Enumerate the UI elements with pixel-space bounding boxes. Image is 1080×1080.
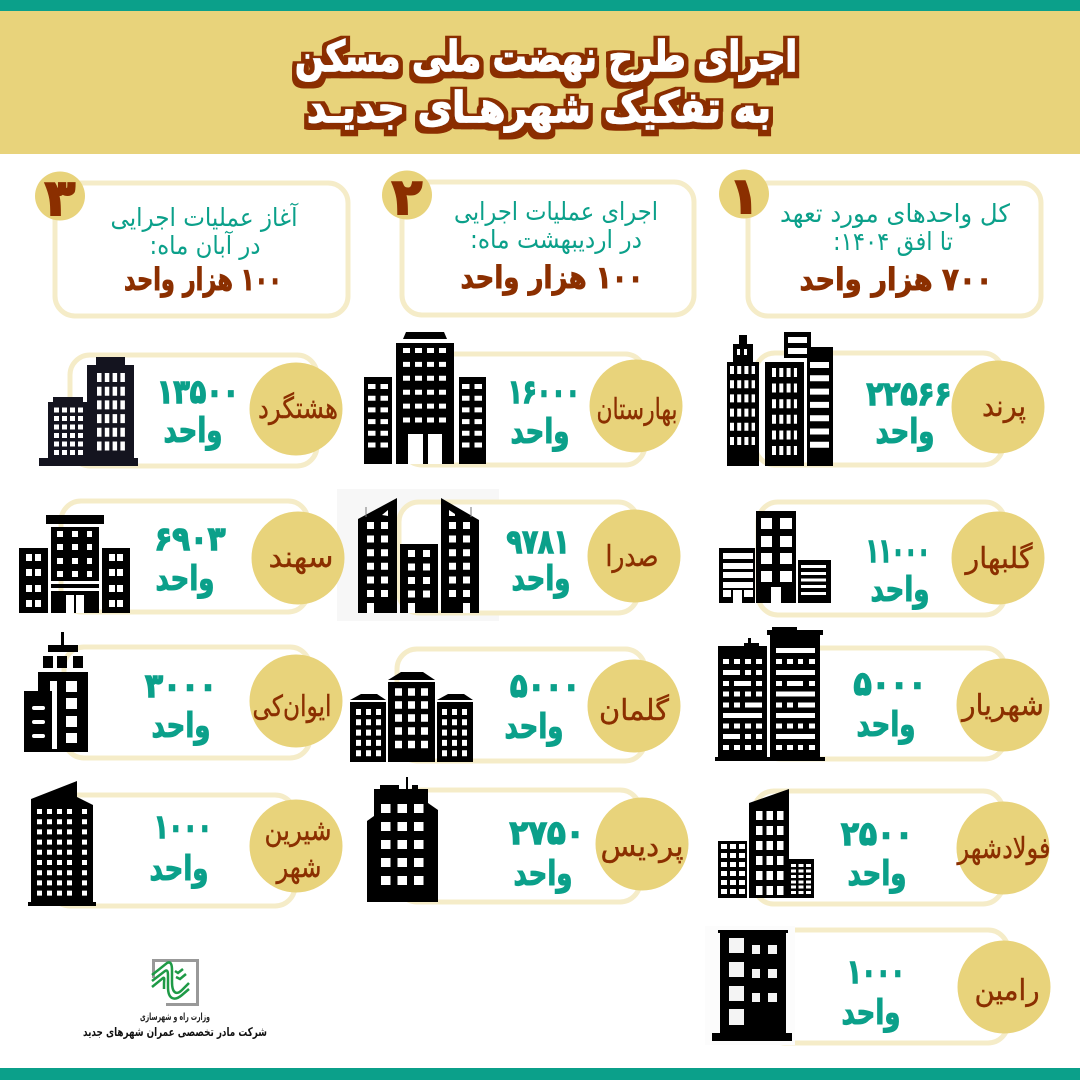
name circle Fooladshahr: فولادشهر: [956, 831, 1050, 865]
city row: Eyvanki: [24, 632, 342, 758]
city row: Shahriar: [715, 627, 1050, 761]
name circle Fooladshahr: [956, 802, 1050, 894]
icon: Hashtgerd buildings: [39, 357, 138, 466]
badge 1: ۱: [729, 167, 759, 225]
name circle Golbahar: [952, 512, 1044, 604]
panel: step 2 summary: [382, 168, 694, 315]
value Hashtgerd: ۱۳۵۰۰: [157, 372, 239, 411]
value Shahriar: ۵۰۰۰: [854, 664, 926, 703]
unit Fooladshahr: واحد: [848, 854, 906, 894]
name circle Baharestan: [590, 360, 682, 452]
unit Baharestan: واحد: [510, 412, 570, 452]
value Golbahar: ۱۱۰۰۰: [866, 531, 930, 570]
badge 1: [719, 167, 769, 225]
city row: Pardis: [367, 777, 688, 902]
name circle Shahriar: [956, 658, 1050, 752]
name circle Sadra: [588, 510, 680, 602]
panel: step 3 summary: [35, 169, 348, 316]
icon: Sahand buildings: [19, 515, 130, 613]
city row: Sadra: [358, 498, 680, 613]
badge 2: [382, 168, 432, 226]
step 3 total: ۱۰۰ هزار واحد: [124, 262, 282, 298]
city row: Shirin Shahr: [28, 781, 342, 906]
name circle Parand: [952, 360, 1044, 454]
title line 2: به تفکیک شهرهـای جدیـد: [307, 83, 771, 133]
grey image background behind Sadra: [337, 489, 499, 621]
icon: Golbahar buildings: [719, 511, 831, 603]
value Baharestan: ۱۶۰۰۰: [508, 372, 580, 411]
company name: شرکت مادر تخصصی عمران شهرهای جدید: [83, 1025, 267, 1039]
value Pardis: ۲۷۵۰: [510, 813, 584, 852]
name circle Pardis: [596, 798, 688, 890]
badge 3: ۳: [45, 169, 75, 227]
badge 2: ۲: [392, 168, 422, 226]
ministry name: وزارت راه و شهرسازی: [140, 1012, 210, 1023]
icon: ministry logo: [152, 960, 198, 1004]
name circle Eyvanki: ایوان‌کی: [252, 689, 332, 723]
name circle Shahriar: شهریار: [960, 688, 1044, 722]
unit Shirin Shahr: واحد: [150, 849, 208, 889]
icon: Parand buildings: [727, 332, 833, 466]
name circle Hashtgerd: هشتگرد: [258, 391, 338, 425]
step 2 month: در اردیبهشت ماه:: [470, 225, 642, 255]
unit Ramin: واحد: [842, 993, 900, 1033]
name circle Pardis: پردیس: [600, 829, 684, 864]
title line 1: اجرای طرح نهضت ملی مسکن: [295, 32, 797, 82]
icon: Baharestan buildings: [364, 332, 486, 464]
city row: Golman: [350, 649, 680, 762]
unit Hashtgerd: واحد: [164, 411, 222, 451]
name circle Parand: پرند: [982, 389, 1026, 424]
name circle Shirin Shahr: [250, 800, 342, 892]
step 1 horizon: تا افق ۱۴۰۴:: [833, 227, 953, 256]
city row: Parand: [727, 332, 1044, 466]
value Sadra: ۹۷۸۱: [506, 522, 570, 561]
step 3 month: در آبان ماه:: [150, 230, 260, 260]
value Sahand: ۶۹۰۳: [154, 519, 226, 558]
unit Sadra: واحد: [512, 559, 570, 599]
icon: Pardis building: [367, 777, 438, 902]
step 2 total: ۱۰۰ هزار واحد: [460, 260, 644, 296]
badge 3: [35, 169, 85, 227]
name circle Eyvanki: [250, 654, 342, 748]
value Eyvanki: ۳۰۰۰: [145, 666, 217, 705]
icon: Shirin Shahr building: [28, 781, 96, 906]
icon: Sadra buildings: [358, 498, 479, 613]
name circle Ramin: رامین: [974, 973, 1040, 1007]
unit Pardis: واحد: [514, 854, 572, 894]
name circle Sadra: صدرا: [606, 539, 658, 573]
unit Shahriar: واحد: [856, 705, 916, 745]
value Fooladshahr: ۲۵۰۰: [841, 814, 913, 853]
name circle Sahand: [252, 512, 344, 604]
value Golman: ۵۰۰۰: [510, 666, 580, 705]
name circle Ramin: [958, 940, 1050, 1034]
bottom teal bar: [0, 1068, 1080, 1080]
unit Sahand: واحد: [156, 559, 214, 599]
header band with title: [0, 11, 1080, 154]
top teal bar: [0, 0, 1080, 11]
step 1 total: ۷۰۰ هزار واحد: [800, 262, 992, 298]
panel: step 1 summary: [719, 167, 1041, 316]
icon: Fooladshahr buildings: [718, 789, 814, 898]
city row: Fooladshahr: [718, 789, 1050, 904]
name circle Golman: گلمان: [599, 693, 669, 727]
logo and organisation name: [83, 960, 267, 1039]
city row: Baharestan: [364, 332, 682, 465]
city row: Hashtgerd: [39, 355, 342, 466]
unit Parand: واحد: [876, 412, 934, 452]
icon: Golman buildings: [350, 672, 473, 762]
city row: Sahand: [19, 501, 344, 613]
name circle Baharestan: بهارستان: [596, 392, 678, 426]
city row: Ramin: [705, 926, 1050, 1045]
name circle Hashtgerd: [250, 362, 342, 456]
step 2 text: اجرای عملیات اجرایی: [454, 197, 658, 226]
icon: Ramin building: [705, 926, 795, 1045]
unit Golbahar: واحد: [870, 570, 930, 610]
unit Eyvanki: واحد: [152, 706, 210, 746]
name circle Sahand: سهند: [268, 540, 334, 574]
name circle Shirin Shahr: شهر: [275, 850, 322, 884]
name circle Shirin Shahr: شیرین: [264, 813, 332, 847]
name circle Golman: [588, 660, 680, 752]
name circle Golbahar: گلبهار: [964, 541, 1033, 575]
value Ramin: ۱۰۰۰: [847, 952, 905, 991]
value Shirin Shahr: ۱۰۰۰: [154, 807, 212, 846]
unit Golman: واحد: [504, 707, 564, 747]
icon: Shahriar buildings: [715, 627, 825, 761]
city row: Golbahar: [719, 502, 1044, 615]
step 3 text: آغاز عملیات اجرایی: [110, 202, 298, 232]
step 1 text: کل واحدهای مورد تعهد: [780, 199, 1010, 229]
icon: Eyvanki building: [24, 632, 88, 752]
value Parand: ۲۲۵۶۶: [866, 374, 952, 413]
